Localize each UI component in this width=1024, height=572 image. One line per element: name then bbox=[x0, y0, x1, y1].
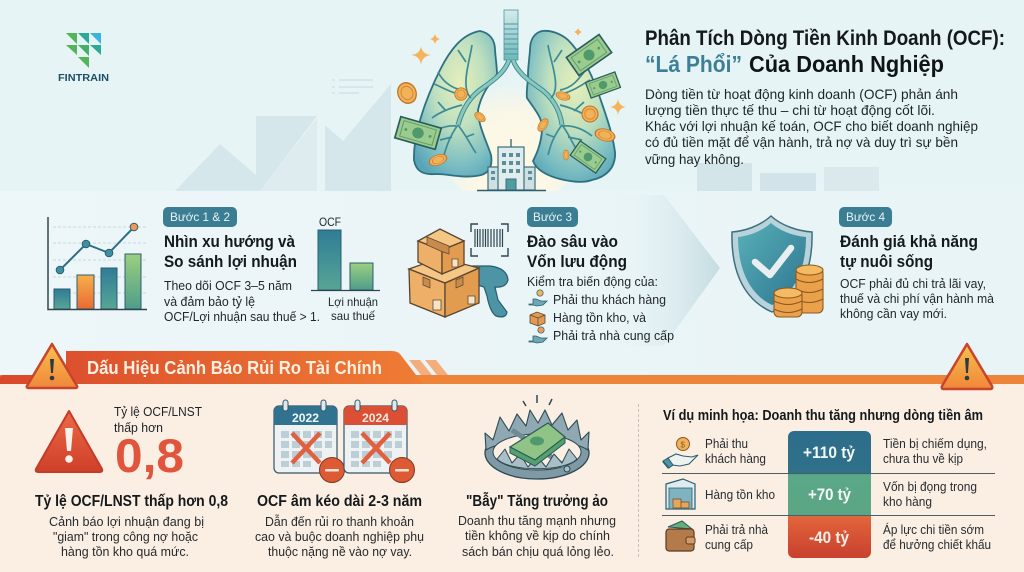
step 4 text bbox=[839, 207, 995, 321]
chart: OCF vs profit: OCF bbox=[319, 215, 341, 229]
step 1 & 2 text: So sánh lợi nhuận bbox=[164, 253, 297, 271]
sparkles bbox=[411, 28, 626, 115]
panel: worked example table bbox=[662, 407, 995, 558]
column: values: +110 tỷ bbox=[803, 443, 855, 462]
building bbox=[477, 139, 546, 190]
panel: worked example table: kho hàng bbox=[883, 495, 932, 509]
panel: ratio warning bbox=[35, 404, 228, 559]
intro paragraph: lượng tiền thực tế thu – chi từ hoạt động cốt lõi. bbox=[645, 102, 935, 118]
panel: worked example table: Tiền bị chiếm dụng, bbox=[883, 437, 987, 451]
panel: ratio warning: 0,8 bbox=[115, 429, 184, 482]
left coins and bills bbox=[394, 80, 487, 168]
step 4 text: OCF phải đủ chi trả lãi vay, bbox=[840, 276, 986, 291]
panel: worked example table: khách hàng bbox=[705, 452, 766, 466]
icon: boxes and barcode scanner bbox=[409, 224, 508, 317]
panel: negative OCF: OCF âm kéo dài 2-3 năm bbox=[257, 493, 422, 510]
title: Của Doanh Nghiệp bbox=[749, 51, 944, 77]
badge: Bước 1 & 2 bbox=[163, 207, 237, 227]
icon: calendar 2024 bbox=[344, 400, 414, 482]
panel: growth trap: "Bẫy" Tăng trưởng ảo bbox=[466, 493, 608, 510]
chevron arrow bbox=[610, 195, 720, 346]
step 1 & 2 text: Theo dõi OCF 3–5 năm bbox=[164, 278, 292, 293]
icon: wallet bbox=[666, 521, 695, 551]
panel: growth trap: tiền không về kịp do chính bbox=[465, 528, 610, 543]
panel: worked example table: Phải thu bbox=[705, 437, 748, 451]
panel: ratio warning: Cảnh báo lợi nhuận đang bị bbox=[49, 514, 204, 529]
panel: worked example table: Phải trả nhà bbox=[705, 523, 768, 537]
icon: hand with dollar coin: $ bbox=[680, 440, 686, 450]
icon: bear trap with cash bbox=[485, 395, 589, 479]
panel: negative OCF: cao và buộc doanh nghiệp phụ bbox=[255, 529, 424, 544]
icon: warehouse bbox=[666, 479, 695, 509]
icon: calendar 2022: 2022 bbox=[292, 411, 319, 425]
step 3 text: Đào sâu vào bbox=[527, 233, 618, 251]
panel: worked example table: để hưởng chiết khấu bbox=[883, 538, 991, 552]
intro paragraph: vững hay không. bbox=[645, 151, 744, 167]
warning banner: Dấu Hiệu Cảnh Báo Rủi Ro Tài Chính bbox=[87, 358, 382, 378]
warning banner bbox=[0, 351, 1024, 384]
logo: FINTRAIN: FINTRAIN bbox=[58, 72, 109, 84]
chart: OCF vs profit bbox=[311, 215, 380, 323]
step 4 text: thuế và chi phí vận hành mà bbox=[840, 291, 995, 306]
column: values: +70 tỷ bbox=[808, 485, 851, 504]
icon: small hand paying bbox=[529, 327, 547, 343]
left lung bbox=[414, 31, 509, 177]
step 1 & 2 text bbox=[163, 207, 320, 324]
panel: ratio warning: "giam" trong công nợ hoặc bbox=[53, 529, 198, 544]
icon: warning triangle left bbox=[27, 344, 77, 388]
chart: OCF vs profit: Lợi nhuận bbox=[328, 295, 378, 309]
step 4 text: không cần vay mới. bbox=[840, 306, 947, 321]
chart: trend bars and line bbox=[48, 217, 147, 310]
intro paragraph: Khác với lợi nhuận kế toán, OCF cho biết doanh nghiệp bbox=[645, 118, 978, 134]
right lung bbox=[513, 31, 615, 182]
title: “Lá Phổi” bbox=[645, 51, 742, 77]
icon: calendar 2024: 2024 bbox=[362, 411, 389, 425]
step 4 text: tự nuôi sống bbox=[840, 253, 933, 271]
badge: Bước 3: Bước 3 bbox=[533, 210, 572, 224]
panel: worked example table: Vốn bị đọng trong bbox=[883, 480, 977, 494]
background: faded chart bbox=[175, 79, 879, 191]
panel: growth trap: sách bán chịu quá lỏng lẻo. bbox=[462, 544, 614, 559]
intro paragraph bbox=[645, 86, 978, 167]
panel: negative OCF: Dẫn đến rủi ro thanh khoản bbox=[265, 514, 414, 529]
panel: growth trap: Doanh thu tăng mạnh nhưng bbox=[458, 513, 616, 528]
illustration: lungs with money bbox=[394, 10, 626, 190]
column: values bbox=[788, 431, 871, 558]
step 1 & 2 text: và đảm bảo tỷ lệ bbox=[164, 294, 255, 309]
panel: negative OCF: thuộc nặng nề vào nợ vay. bbox=[268, 544, 412, 559]
icon: small hand with coin bbox=[529, 290, 547, 306]
step 1 & 2 text: OCF/Lợi nhuận sau thuế > 1. bbox=[164, 309, 320, 324]
panel: worked example table: Hàng tồn kho bbox=[705, 488, 775, 502]
badge: Bước 4: Bước 4 bbox=[846, 210, 885, 224]
intro paragraph: Dòng tiền từ hoạt động kinh doanh (OCF) phản ánh bbox=[645, 86, 958, 102]
background: cream glow behind lungs bbox=[436, 50, 586, 210]
panel: worked example table: cung cấp bbox=[705, 538, 753, 552]
step 1 & 2 text: Nhìn xu hướng và bbox=[164, 233, 296, 251]
panel: negative OCF bbox=[255, 400, 424, 559]
logo: FINTRAIN bbox=[58, 33, 109, 84]
badge: Bước 3 bbox=[527, 207, 578, 227]
step 3 text: Phải thu khách hàng bbox=[553, 292, 666, 307]
step 3 text: Phải trả nhà cung cấp bbox=[553, 328, 674, 343]
step 3 text: Vốn lưu động bbox=[527, 253, 627, 271]
icon: shield and coins bbox=[732, 216, 823, 317]
step 4 text: Đánh giá khả năng bbox=[840, 233, 978, 251]
icon: hand with dollar coin bbox=[663, 438, 698, 468]
step 3 text bbox=[527, 207, 674, 343]
icon: small box bbox=[530, 312, 545, 326]
background: top header bbox=[0, 0, 1024, 191]
panel: worked example table: Áp lực chi tiền sớm bbox=[883, 522, 984, 537]
step 3 text: Hàng tồn kho, và bbox=[553, 310, 647, 325]
title bbox=[645, 27, 1005, 77]
badge: Bước 1 & 2: Bước 1 & 2 bbox=[170, 210, 230, 224]
chart: OCF vs profit: sau thuế bbox=[331, 309, 375, 323]
badge: Bước 4 bbox=[839, 207, 892, 227]
icon: warning triangle right bbox=[942, 344, 992, 389]
right coins and bills bbox=[536, 35, 620, 173]
trachea bbox=[504, 10, 518, 60]
panel: growth trap bbox=[458, 395, 616, 559]
icon: calendar 2022 bbox=[274, 400, 344, 482]
step 3 text: Kiểm tra biến động của: bbox=[527, 274, 658, 289]
panel: ratio warning: Tỷ lệ OCF/LNST bbox=[114, 404, 202, 419]
panel: worked example table: chưa thu về kịp bbox=[883, 452, 963, 466]
panel: warning section background bbox=[0, 381, 1024, 572]
icon: red warning triangle bbox=[36, 411, 102, 472]
panel: ratio warning: hàng tồn kho quá mức. bbox=[61, 544, 189, 559]
panel: ratio warning: thấp hơn bbox=[114, 420, 163, 435]
column: values: -40 tỷ bbox=[809, 528, 849, 547]
panel: ratio warning: Tỷ lệ OCF/LNST thấp hơn 0,8 bbox=[35, 493, 228, 510]
intro paragraph: có đủ tiền mặt để vận hành, trả nợ và duy trì sự bền bbox=[645, 134, 958, 150]
